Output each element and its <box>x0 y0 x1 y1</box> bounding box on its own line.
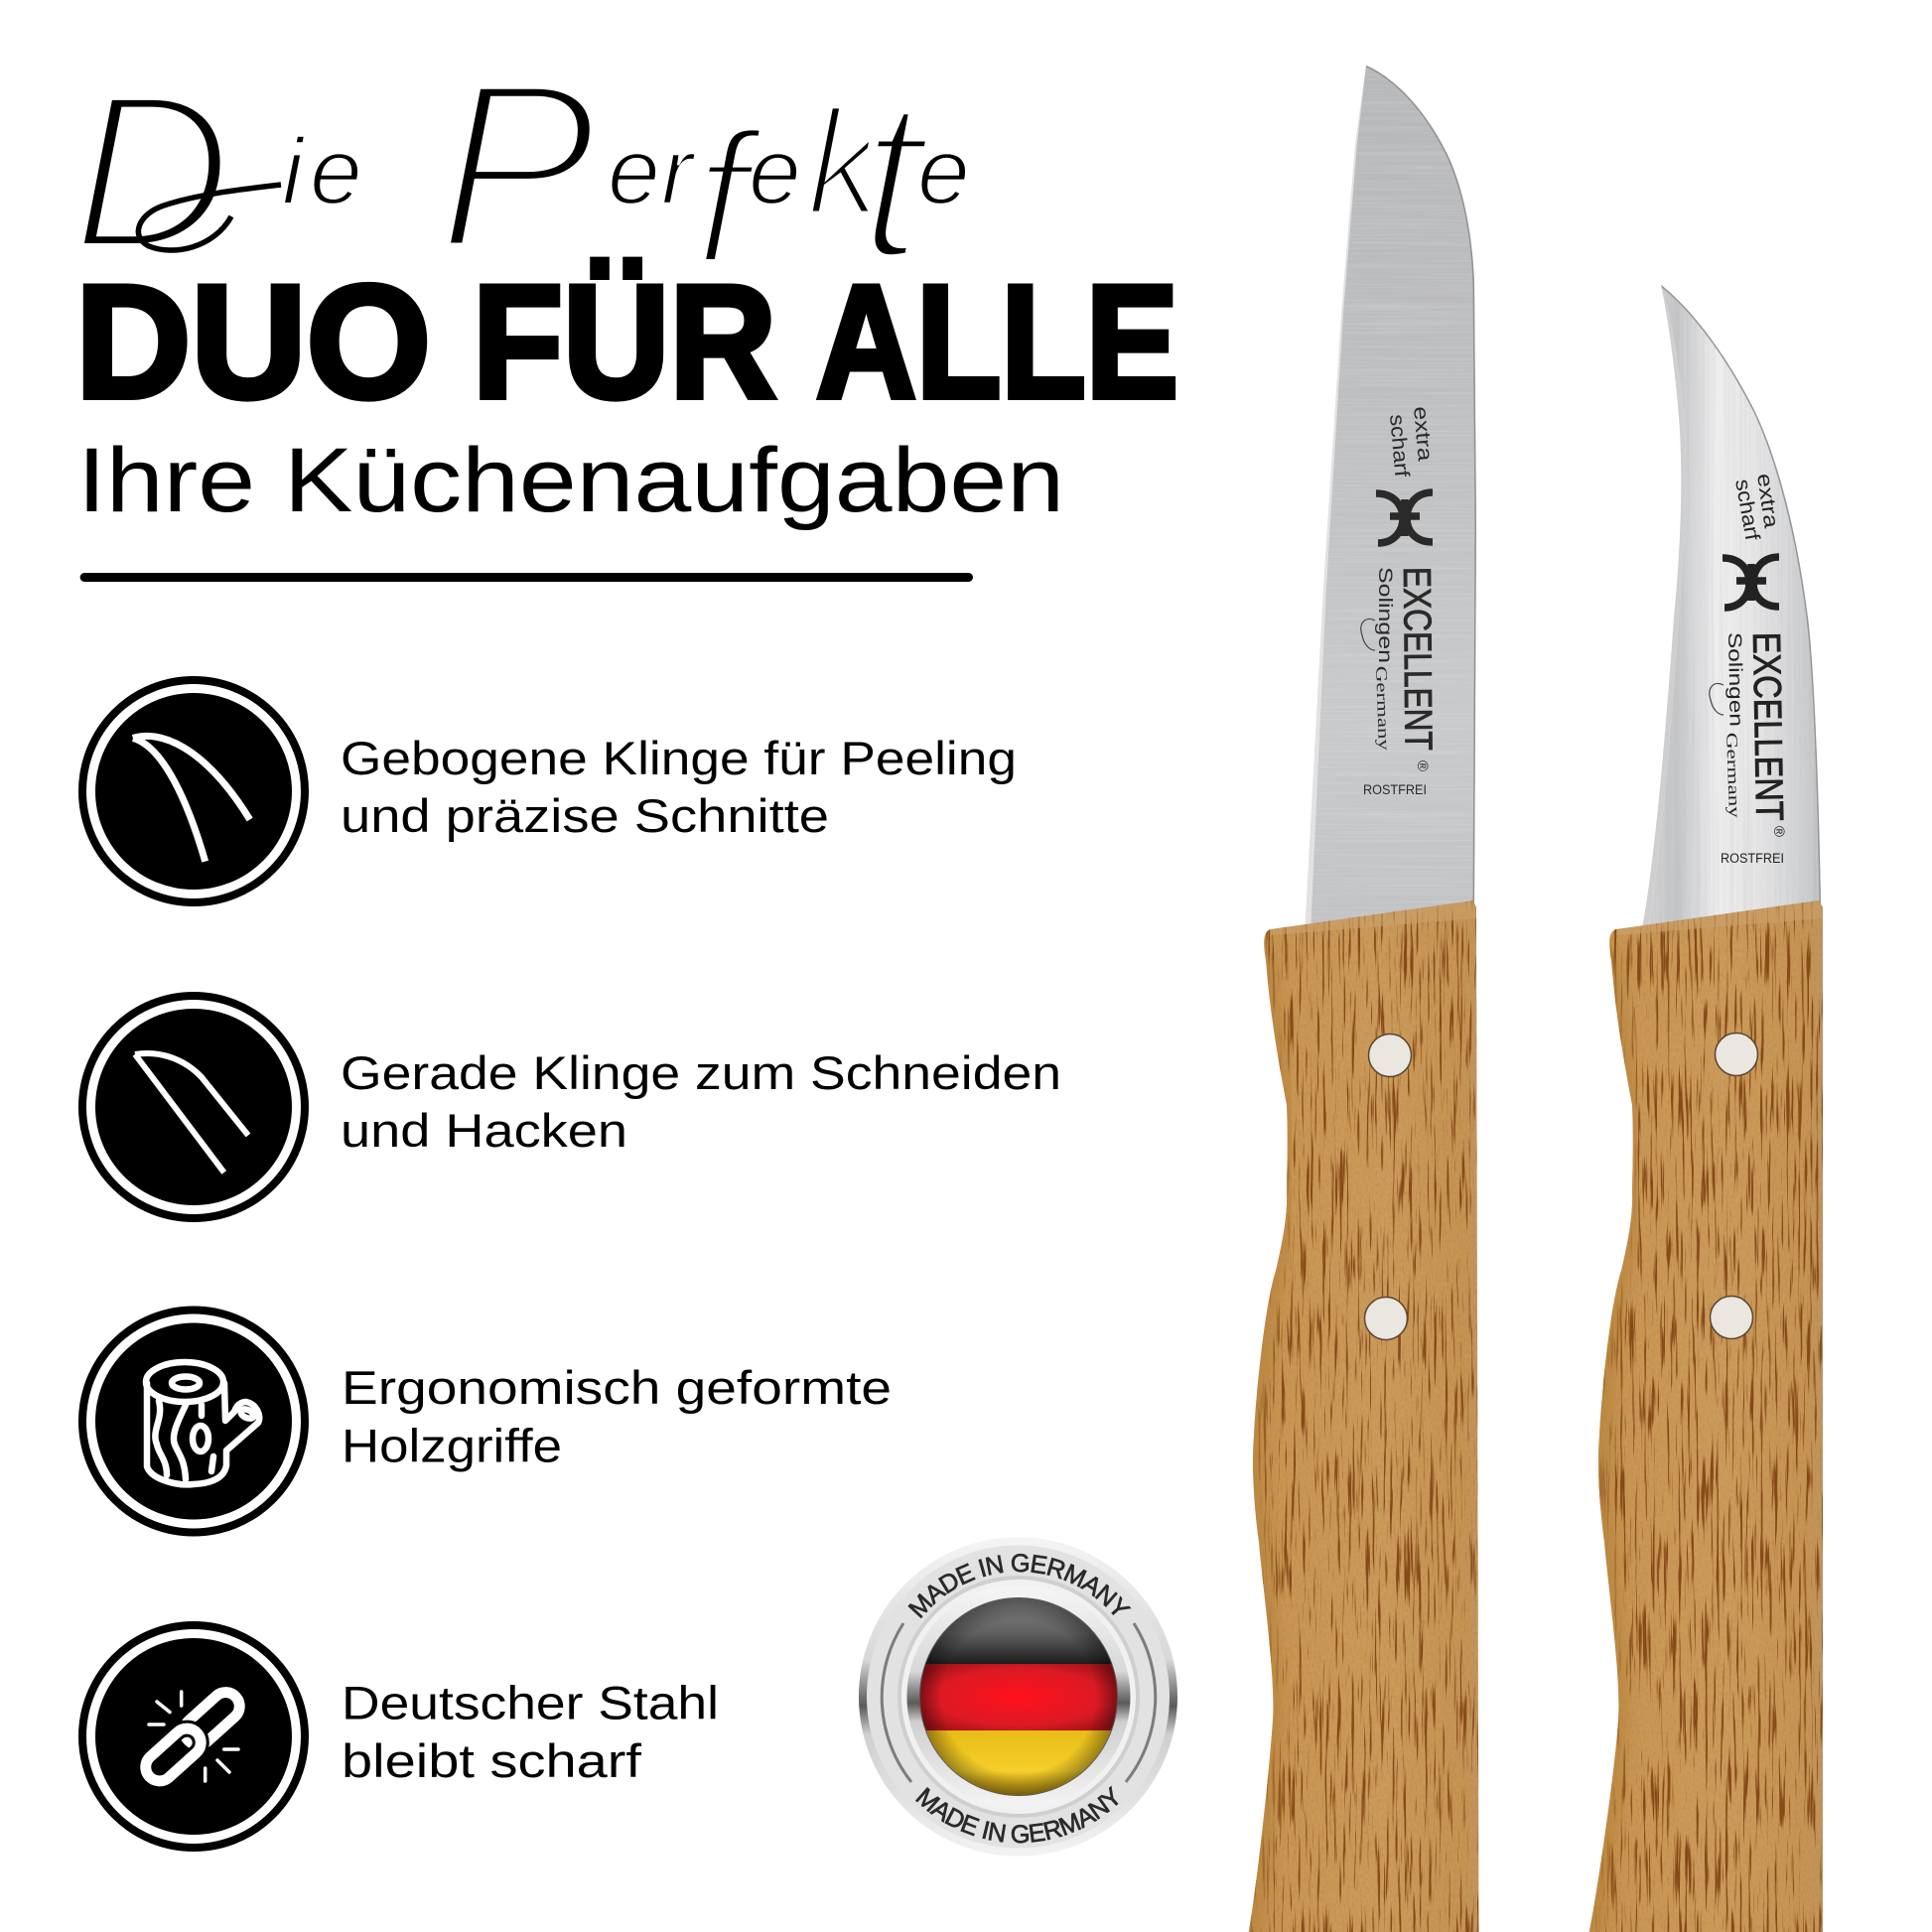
feature text <box>342 1362 892 1473</box>
title: script line: e <box>749 119 801 224</box>
feature text: Gerade Klinge zum Schneiden <box>341 1047 1061 1100</box>
title: bold line: ALLE <box>816 252 1178 432</box>
logo mark <box>1723 557 1779 608</box>
title: script line: k <box>806 78 889 247</box>
badge side arcs <box>882 1623 1156 1782</box>
badge text top: MADE IN GERMANY <box>907 1553 1132 1618</box>
blade engraving: extra <box>1409 405 1437 463</box>
blade engraving: Germany <box>1372 666 1392 751</box>
handle <box>1241 894 1484 1932</box>
blade engraving: Solingen <box>1724 632 1746 727</box>
icon: log <box>82 1311 305 1533</box>
rivet <box>1710 1297 1753 1338</box>
subtitle: Ihre Küchenaufgaben <box>77 430 1064 531</box>
feature text: und Hacken <box>341 1105 627 1158</box>
feature text: und präzise Schnitte <box>341 790 829 843</box>
blade engraving: scharf <box>1385 413 1413 478</box>
title: script line: f <box>695 93 764 304</box>
blade engraving: EXCELLENT <box>1744 631 1790 821</box>
title: bold line: DUO <box>75 252 431 432</box>
feature text: bleibt scharf <box>342 1735 642 1788</box>
feature text <box>342 1678 719 1788</box>
handle <box>1584 894 1827 1932</box>
blade engraving: ROSTFREI <box>1721 851 1784 866</box>
blade engraving <box>1710 472 1790 866</box>
feature 2: straight blade <box>82 996 1061 1218</box>
title: script line: e <box>310 119 388 224</box>
feature text: Holzgriffe <box>342 1421 562 1473</box>
feature 4: German steel <box>82 1625 719 1848</box>
blade engraving: ® <box>1414 760 1431 771</box>
blade engraving: extra <box>1752 472 1783 530</box>
badge text bottom: MADE IN GERMANY <box>915 1785 1118 1844</box>
blade engraving <box>1361 405 1440 797</box>
title: bold line: FÜR <box>473 252 776 432</box>
feature text: Deutscher Stahl <box>342 1678 719 1730</box>
badge: made in Germany <box>859 1537 1177 1857</box>
knife: curved blade <box>1584 278 1827 1932</box>
rivet <box>1716 1033 1757 1076</box>
feature 1: curved blade <box>82 680 1017 902</box>
icon: chain link <box>82 1625 305 1848</box>
title: script line: i <box>282 119 306 224</box>
rivet <box>1364 1297 1408 1340</box>
feature text: Gebogene Klinge für Peeling <box>341 733 1017 785</box>
blade engraving: EXCELLENT <box>1395 567 1440 751</box>
blade <box>1305 66 1476 924</box>
blade engraving: Solingen <box>1374 567 1395 663</box>
blade engraving: ROSTFREI <box>1363 782 1427 797</box>
icon: straight blade <box>82 996 305 1218</box>
feature text <box>341 1047 1061 1158</box>
title: bold line <box>75 252 1178 432</box>
blade engraving: Germany <box>1723 733 1742 818</box>
feature text <box>341 733 1017 843</box>
icon: curved blade <box>82 680 305 902</box>
blade engraving: ® <box>1770 826 1787 837</box>
blade engraving: scharf <box>1730 478 1764 542</box>
logo mark <box>1376 492 1433 543</box>
knife: straight blade <box>1241 60 1489 1932</box>
title: script line: D <box>71 48 232 296</box>
title: script line: e <box>917 119 970 224</box>
title: script line: e <box>608 119 660 224</box>
title underline <box>80 573 973 582</box>
feature text: Ergonomisch geformte <box>342 1362 892 1415</box>
blade <box>1638 278 1827 933</box>
flag <box>919 1596 1118 1797</box>
rivet <box>1368 1035 1412 1076</box>
title: script line: t <box>860 51 931 306</box>
feature 3: wooden handle <box>82 1311 892 1533</box>
title: script line: r <box>661 119 696 224</box>
title: script line: P <box>437 33 597 300</box>
decorative swash under script line <box>138 185 281 250</box>
